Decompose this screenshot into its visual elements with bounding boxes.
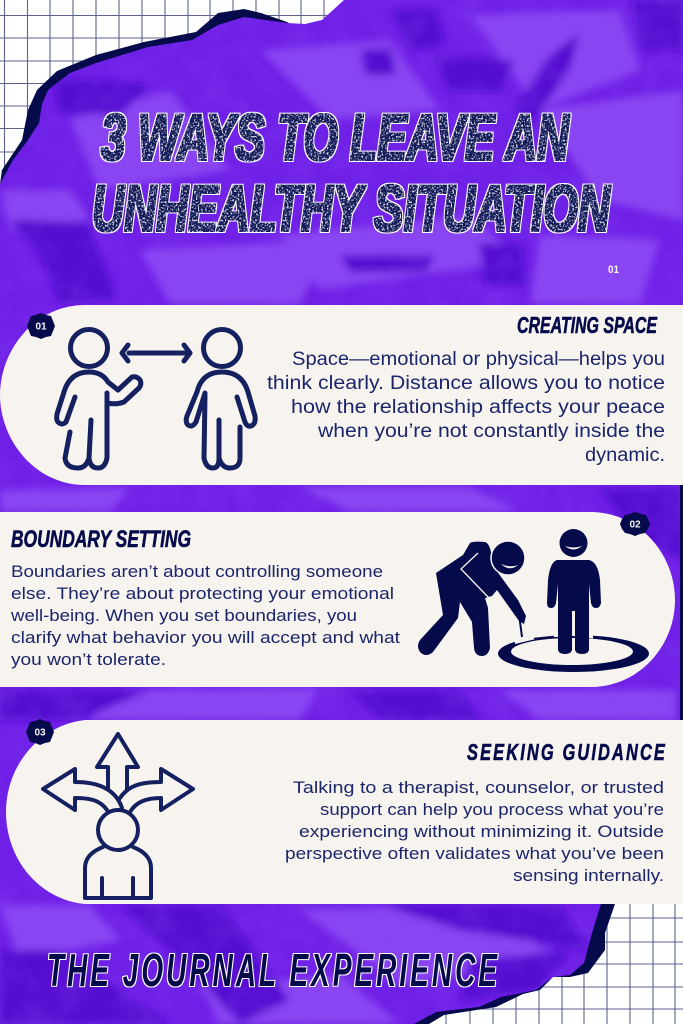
text block: dynamic. (585, 445, 665, 466)
text block: else. They’re about protecting your emotional (11, 584, 394, 603)
badge 02: 02 (629, 520, 641, 530)
text block: experiencing without minimizing it. Outside (299, 822, 664, 841)
text block (10, 562, 400, 669)
text block: sensing internally. (513, 866, 664, 885)
badge 01 (27, 313, 55, 339)
text block: when you’re not constantly inside the (317, 421, 665, 442)
text block: well-being. When you set boundaries, you (10, 606, 357, 625)
panel: boundary setting (0, 512, 675, 687)
text block: think clearly. Distance allows you to notice (267, 373, 665, 394)
text block: how the relationship affects your peace (291, 397, 665, 418)
text block: perspective often validates what you’ve been (285, 844, 664, 863)
text block (285, 778, 664, 885)
badge 03 (26, 719, 54, 745)
panel: seeking guidance (6, 719, 683, 904)
navy strip right edge (680, 485, 683, 720)
icon: two people keeping distance (57, 330, 255, 468)
background: navy torn edge top (0, 9, 300, 190)
page number: 01 (608, 264, 619, 276)
text block (267, 349, 665, 466)
background: navy torn edge bottom (400, 904, 615, 1024)
text block: Space—emotional or physical—helps you (292, 349, 665, 370)
text block: Boundaries aren’t about controlling someone (11, 562, 383, 581)
text block: Talking to a therapist, counselor, or trusted (293, 778, 664, 797)
badge 02 (620, 512, 650, 536)
heading: BOUNDARY SETTING (11, 526, 191, 553)
text block: support can help you process what you’re (320, 800, 664, 819)
text block: you won’t tolerate. (11, 650, 166, 669)
title (92, 100, 611, 245)
icon: person with three arrows (43, 734, 193, 898)
text block: clarify what behavior you will accept and what (11, 628, 400, 647)
badge 03: 03 (34, 728, 46, 738)
badge 01: 01 (35, 322, 47, 332)
icon: person drawing a boundary circle (418, 529, 649, 672)
panel: creating space (0, 305, 683, 485)
